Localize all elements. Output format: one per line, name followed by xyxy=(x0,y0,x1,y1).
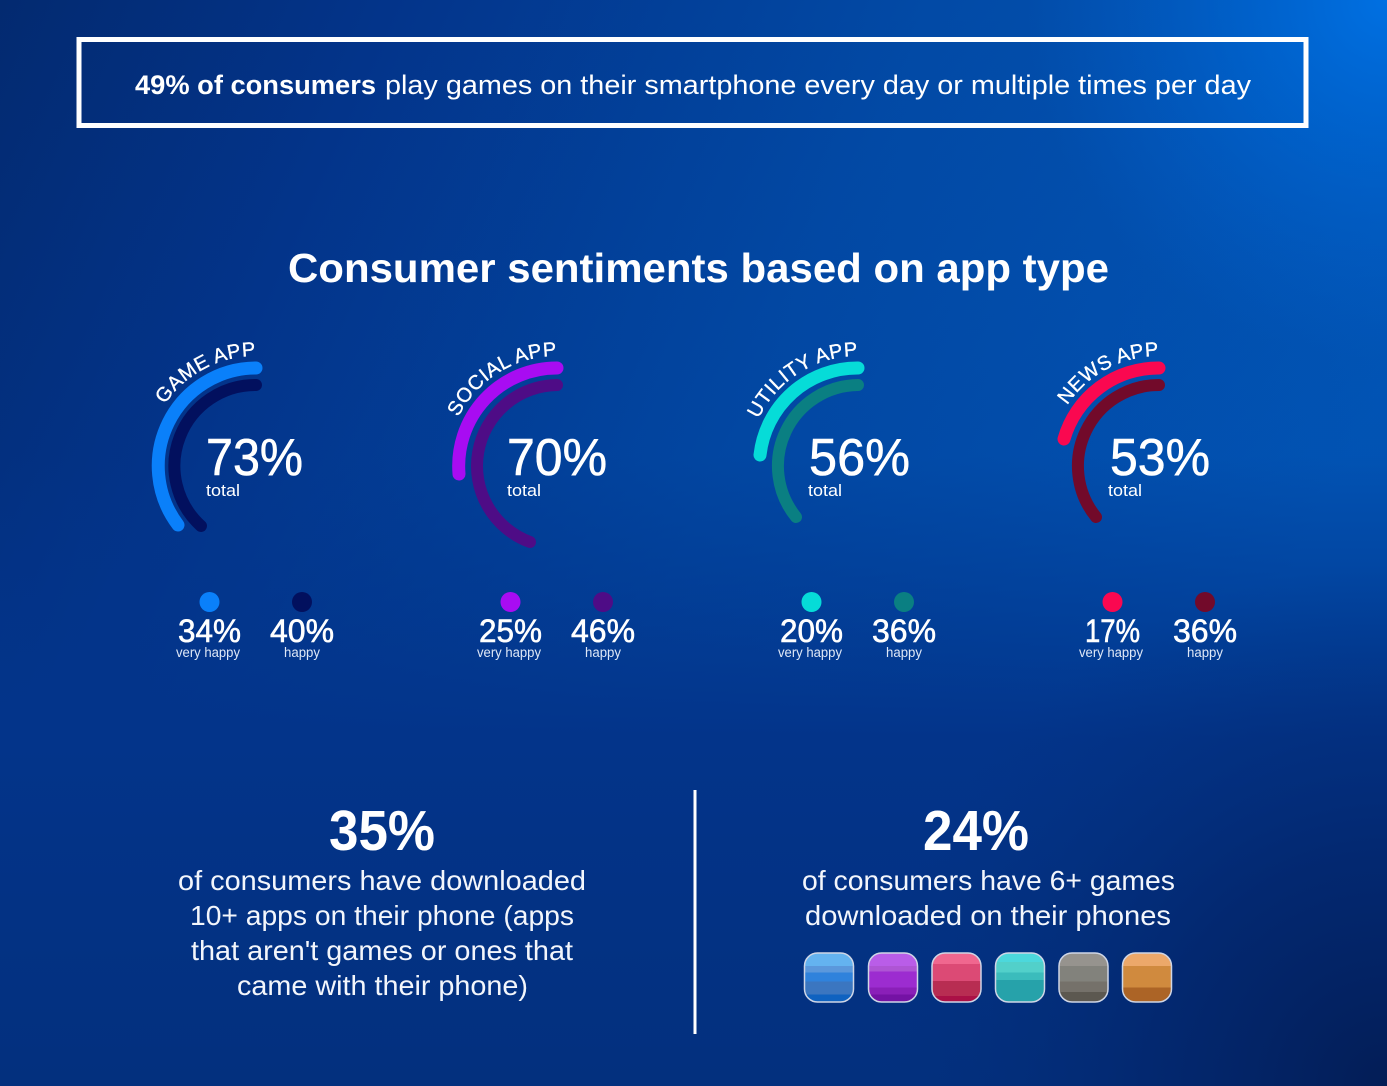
legend: very happy: very happy xyxy=(176,645,240,660)
legend: very happy: very happy xyxy=(778,645,842,660)
total: 53%: 53% xyxy=(1110,429,1210,487)
total caption: total xyxy=(808,481,842,500)
heading: Consumer sentiments based on app type xyxy=(288,245,1109,291)
panel: news app xyxy=(1056,342,1237,660)
legend: very happy: 25% xyxy=(479,613,542,649)
chart: social app arcs xyxy=(459,368,557,542)
legend: very happy: 17% xyxy=(1085,613,1140,649)
figure: 24%: 24% xyxy=(923,799,1029,863)
legend: happy: happy xyxy=(886,645,922,660)
legend: happy xyxy=(872,592,936,660)
legend: happy: 36% xyxy=(872,613,936,649)
text block: 24% description xyxy=(802,865,1175,931)
label: social app: SOCIAL APP xyxy=(448,342,556,416)
stat: 35% downloaded 10+ apps xyxy=(178,799,586,1001)
callout: daily smartphone gaming: play games on their smartphone every day or multiple times per day xyxy=(385,70,1252,100)
legend: very happy: very happy xyxy=(1079,645,1143,660)
label: utility app: UTILITY APP xyxy=(746,342,856,416)
legend: very happy xyxy=(477,592,542,660)
total caption: total xyxy=(1108,481,1142,500)
legend: very happy xyxy=(1079,592,1143,660)
text block: 35% description: that aren't games or ones that xyxy=(191,935,573,966)
chart: game app arcs xyxy=(158,368,256,526)
chart: news app arcs xyxy=(1064,368,1159,517)
total: 56%: 56% xyxy=(809,429,910,487)
callout: daily smartphone gaming: 49% of consumers xyxy=(135,70,376,100)
legend: very happy xyxy=(176,592,241,660)
legend: happy xyxy=(571,592,635,660)
legend: very happy xyxy=(778,592,843,660)
legend: happy: 36% xyxy=(1173,613,1237,649)
legend: happy xyxy=(270,592,334,660)
total caption: total xyxy=(507,481,541,500)
total: 70%: 70% xyxy=(507,429,607,487)
legend: very happy: very happy xyxy=(477,645,541,660)
label: game app: GAME APP xyxy=(156,342,254,402)
stat: 24% have 6+ games xyxy=(802,799,1175,1002)
figure: 35%: 35% xyxy=(329,799,435,863)
legend: happy xyxy=(1173,592,1237,660)
total caption: total xyxy=(206,481,240,500)
text block: 24% description: downloaded on their phones xyxy=(805,900,1171,931)
legend: happy: happy xyxy=(585,645,621,660)
text block: 35% description: of consumers have downloaded xyxy=(178,865,586,896)
legend: happy: happy xyxy=(284,645,320,660)
legend: very happy: 20% xyxy=(780,613,843,649)
text block: 35% description: 10+ apps on their phone (apps xyxy=(190,900,574,931)
legend: very happy: 34% xyxy=(178,613,241,649)
panel: game app xyxy=(152,342,334,660)
callout: daily smartphone gaming xyxy=(79,40,1306,126)
panel: social app xyxy=(448,342,635,660)
legend: happy: 40% xyxy=(270,613,334,649)
text block: 35% description xyxy=(178,865,586,1001)
text block: 35% description: came with their phone) xyxy=(237,970,528,1001)
legend: happy: happy xyxy=(1187,645,1223,660)
text block: 24% description: of consumers have 6+ games xyxy=(802,865,1175,896)
chart: utility app arcs xyxy=(760,368,858,517)
label: news app: NEWS APP xyxy=(1056,342,1158,404)
total: 73%: 73% xyxy=(206,429,303,487)
panel: utility app xyxy=(746,342,936,660)
icons: six app tiles xyxy=(804,953,1172,1002)
legend: happy: 46% xyxy=(571,613,635,649)
